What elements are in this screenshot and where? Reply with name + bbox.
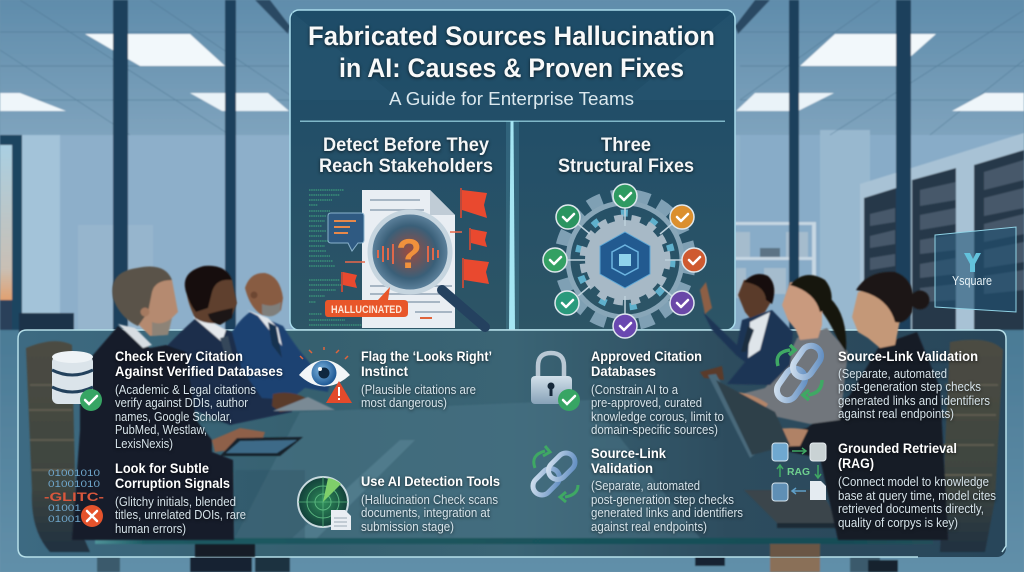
heading: detect (319, 135, 493, 177)
text: check every citation: Check Every Citation (115, 349, 243, 364)
icon: magnifier: ? (396, 230, 422, 277)
heading: fixes: Three (601, 135, 651, 156)
text: grounded retrieval: (Connect model to knowledge (838, 475, 989, 489)
heading: detect: Reach Stakeholders (319, 156, 493, 177)
text: grounded retrieval: retrieved documents directly, (838, 502, 984, 516)
text: source-link validation right: (Separate, automated (838, 367, 947, 381)
label: hallucinated: HALLUCINATED (331, 304, 402, 316)
icon: magnifier (370, 212, 485, 327)
icon: Y logo (964, 253, 981, 272)
person: man pointing (700, 274, 793, 458)
subtitle: A Guide for Enterprise Teams (389, 89, 634, 109)
icon: RAG loop (772, 443, 826, 501)
icon: radar with document (298, 477, 351, 530)
text: AI detection tools: Use AI Detection Tools (361, 474, 500, 489)
text: source-link validation right (838, 349, 990, 421)
person: man three (228, 273, 330, 412)
title (308, 21, 715, 83)
text: flag looks right: (Plausible citations are (361, 383, 476, 397)
text: subtle corruption signals: titles, unrelated DOIs, rare (115, 508, 246, 522)
title: in AI: Causes & Proven Fixes (339, 53, 684, 83)
icon: glitch binary: 01001010 (48, 468, 100, 479)
person: man two (167, 266, 335, 425)
text: AI detection tools: documents, integration at (361, 506, 490, 520)
icon: red flags (342, 188, 489, 292)
text: source-link validation left: Source-Link (591, 446, 666, 461)
icon: glitch binary (44, 468, 104, 527)
text: check every citation: (Academic & Legal citations (115, 383, 256, 397)
text: grounded retrieval: (RAG) (838, 456, 874, 471)
text: source-link validation left: against real endpoints) (591, 520, 707, 534)
person: man one (72, 266, 303, 540)
text: subtle corruption signals: Look for Subtle (115, 461, 209, 476)
text: approved citation databases (591, 349, 724, 437)
text: source-link validation right: against real endpoints) (838, 407, 954, 421)
text: check every citation: LexisNexis) (115, 437, 173, 451)
icon: eye with warning (299, 347, 352, 403)
text: source-link validation right: generated links and identifiers (838, 394, 990, 408)
item: subtle corruption signals (44, 461, 246, 536)
text: approved citation databases: knowledge corous, limit to (591, 410, 724, 424)
heading: fixes: Structural Fixes (558, 156, 694, 177)
text: source-link validation left: (Separate, automated (591, 479, 700, 493)
illustration: gear with checks (543, 184, 706, 338)
icon: padlock with check (531, 353, 580, 411)
text: check every citation: names, Google Scholar, (115, 410, 232, 424)
text: flag looks right: Flag the ‘Looks Right’ (361, 349, 492, 364)
text: approved citation databases: Databases (591, 364, 656, 379)
item: check every citation (52, 349, 283, 451)
icon: database with check (52, 351, 102, 411)
text: approved citation databases: Approved Citation (591, 349, 702, 364)
icon: document (362, 190, 455, 328)
text: source-link validation left: generated links and identifiers (591, 506, 743, 520)
heading: detect: Detect Before They (323, 135, 489, 156)
text: AI detection tools: submission stage) (361, 520, 454, 534)
people: left group (72, 266, 335, 540)
text: grounded retrieval: quality of corpys is key) (838, 516, 958, 530)
text: flag looks right: most dangerous) (361, 396, 447, 410)
item: approved citation databases (531, 349, 724, 437)
icon: chain link (773, 342, 825, 404)
text: approved citation databases: domain-specific sources) (591, 423, 718, 437)
text: flag looks right (361, 349, 492, 410)
icon: chain link (529, 446, 579, 502)
text: subtle corruption signals (115, 461, 246, 536)
item: grounded retrieval (772, 441, 996, 530)
item: source-link validation left (529, 446, 743, 534)
item: flag looks right (299, 347, 492, 410)
text: AI detection tools (361, 474, 500, 534)
panel: lower content (18, 330, 1006, 557)
text: source-link validation right: Source-Link Validation (838, 349, 978, 364)
text: grounded retrieval (838, 441, 996, 530)
heading: fixes (558, 135, 694, 177)
text: subtle corruption signals: human errors) (115, 522, 186, 536)
text: grounded retrieval: base at query time, model cites (838, 489, 996, 503)
icon: speech bubble (328, 213, 364, 251)
check badges (543, 184, 706, 338)
text: grounded retrieval: Grounded Retrieval (838, 441, 957, 456)
logo card: Ysquare (935, 227, 1016, 312)
person: woman two (763, 272, 948, 540)
text: source-link validation left (591, 446, 743, 534)
icon: glitch binary: 01001010 (48, 479, 100, 490)
icon: glitch binary: 01001 (48, 514, 81, 525)
text: check every citation: verify against DDIs, author (115, 396, 248, 410)
text: AI detection tools: (Hallucination Check scans (361, 493, 498, 507)
text: approved citation databases: (Constrain AI to a (591, 383, 678, 397)
text: check every citation: Against Verified Databases (115, 364, 283, 379)
item: AI detection tools (298, 474, 500, 534)
text: source-link validation right: post-generation step checks (838, 380, 981, 394)
icon: RAG loop: RAG (787, 467, 810, 478)
panel: title and columns (290, 10, 735, 330)
brand name: Ysquare (952, 273, 992, 288)
text: check every citation (115, 349, 283, 451)
icon: glitch binary: 01001 (48, 503, 81, 514)
illustration: hallucinated document under magnifier (309, 188, 489, 328)
icon: glitch binary: -GLITC- (44, 492, 104, 504)
text: flag looks right: Instinct (361, 364, 408, 379)
item: source-link validation right (773, 342, 990, 421)
conference table and chairs (26, 340, 1003, 557)
people: right group (700, 272, 948, 540)
text: approved citation databases: pre-approved, curated (591, 396, 702, 410)
text: source-link validation left: post-generation step checks (591, 493, 734, 507)
person: woman one (733, 275, 848, 424)
text: subtle corruption signals: (Glitchy initials, blended (115, 495, 236, 509)
text: source-link validation left: Validation (591, 461, 653, 476)
title: Fabricated Sources Hallucination (308, 21, 715, 51)
label: hallucinated (325, 287, 408, 317)
text: check every citation: PubMed, Westlaw, (115, 423, 207, 437)
text: subtle corruption signals: Corruption Signals (115, 476, 230, 491)
